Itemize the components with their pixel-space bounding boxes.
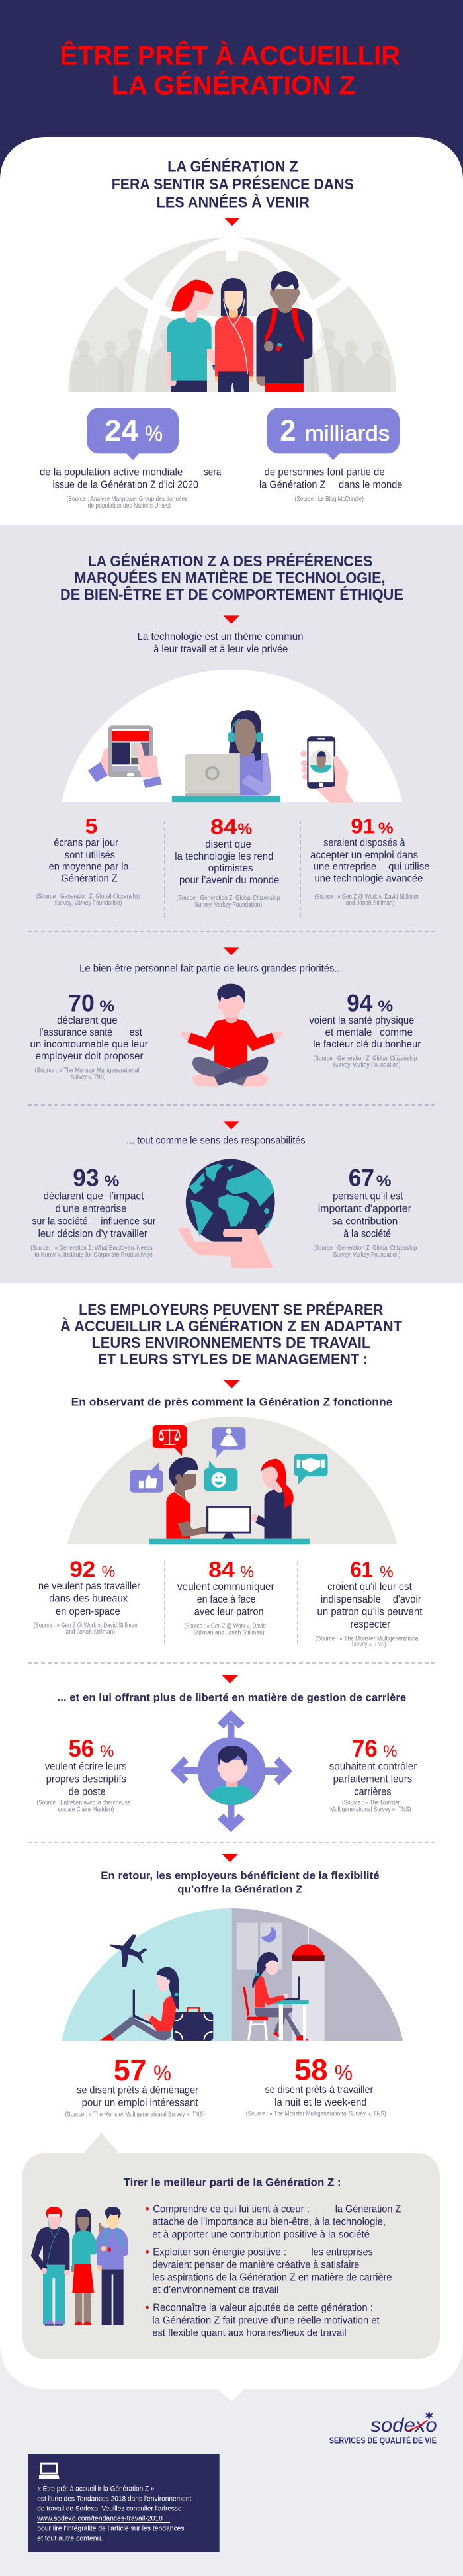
stat: 76 %: % [383, 1742, 397, 1761]
stat: 94 %: et mentale [325, 1026, 372, 1038]
stat: 91 %: qui utilise [388, 861, 430, 872]
man [166, 1457, 215, 1539]
stat: 93 %: l’impact [109, 1190, 144, 1202]
stat: 91 %: % [378, 819, 394, 837]
stat: 84 % face à face: en face à face [197, 1593, 256, 1605]
stat: 93 %: to Know », Institute for Corporate Productivity) [34, 1251, 153, 1259]
stat: 2 milliards: dans le monde [339, 479, 402, 490]
stat: 93 %: % [105, 1173, 119, 1190]
note text: est l'une des Tendances 2018 dans l'environnement [37, 2495, 192, 2503]
subheading well-being: Le bien-être personnel fait partie de leurs grandes priorités... [79, 963, 343, 974]
illustration: technology dome [62, 670, 402, 803]
stat: 61 %: un patron qu'ils peuvent [317, 1606, 423, 1617]
stat: 61 %: respecter [350, 1619, 390, 1630]
woman [247, 1459, 294, 1539]
tip 2: Exploiter son énergie positive : [153, 2246, 286, 2258]
callout heading: Tirer le meilleur parti de la Génération Z : [124, 2176, 341, 2189]
note text: de travail de Sodexo. Veuillez consulter l'adresse [37, 2505, 182, 2512]
stat: 57 %: (Source : « The Monster Multigenerational Survey », TNS) [65, 2110, 205, 2118]
stat: 61 %: 61 [350, 1558, 373, 1583]
person in teal [71, 2209, 106, 2325]
window and moon [237, 1923, 282, 1970]
note text [36, 2485, 192, 2542]
illustration: three people [31, 2207, 128, 2326]
arrow [224, 218, 240, 226]
icon: person with four arrows [171, 1710, 292, 1832]
note text: et tout autre contenu. [37, 2534, 103, 2542]
stat: 67 %: Survey, Varkey Foundation) [333, 1251, 400, 1259]
desk [172, 796, 280, 802]
stat: 93 %: leur décision d'y travailler [38, 1228, 147, 1239]
icon: laptop [39, 2463, 60, 2479]
title [60, 40, 400, 101]
stat: 70 %: l’assurance santé [39, 1026, 112, 1038]
stat: 5 écrans: écrans par jour [54, 836, 118, 848]
stat: 70 %: employeur doit proposer [36, 1050, 144, 1061]
monitor [206, 1506, 251, 1539]
stat: 76 %: carrières [354, 1786, 392, 1797]
panel background [0, 525, 463, 1283]
stat: 56 %: % [100, 1742, 114, 1761]
subheading observation: En observant de près comment la Génération Z fonctionne [71, 1396, 392, 1408]
heading: LA GÉNÉRATION Z [167, 157, 298, 175]
footer note box [28, 2454, 220, 2552]
stat: 70 %: 70 [68, 989, 95, 1017]
subheading responsibility: ... tout comme le sens des responsabilités [126, 1135, 306, 1146]
subheading flexibility: En retour, les employeurs bénéficient de la flexibilité [101, 1870, 380, 1882]
stat: 5 écrans: (Source : Generation Z, Global Citizenship [36, 893, 140, 900]
stat: 70 %: Survey », TNS) [71, 1073, 105, 1081]
person 1 [167, 280, 228, 392]
stat: 91 % [310, 814, 430, 907]
woman on laptop [185, 710, 271, 796]
heading: LEURS ENVIRONNEMENTS DE TRAVAIL [91, 1334, 370, 1351]
stat: 67 %: % [376, 1173, 392, 1190]
stat: 92 %: ne veulent pas travailler [38, 1580, 140, 1591]
stat: 91 %: 91 [351, 814, 375, 838]
stat: 84 % face à face: (Source : « Gen Z @ Work », David [185, 1623, 266, 1630]
stat: 93 %: influence sur [101, 1216, 156, 1227]
stat: 2 milliards: milliards [305, 422, 390, 446]
stat: 94 % [309, 989, 421, 1069]
stat: 57 %: pour un emploi intéressant [82, 2097, 198, 2108]
tip 1 [146, 2203, 401, 2240]
tip 2 [146, 2246, 392, 2295]
lamp [292, 1923, 325, 2041]
stat: 76 %: (Source : « The Monster [342, 1799, 400, 1806]
stat: 91 %: and Jonah Stillman) [346, 900, 395, 907]
tip 1: et à apporter une contribution positive à la société [152, 2229, 370, 2240]
callout background [22, 2133, 440, 2359]
stat: 5 écrans: sont utilisés [65, 849, 115, 860]
stat: 84 % face à face: veulent communiquer [177, 1581, 274, 1592]
stat: 2 milliards: la Génération Z [259, 479, 325, 490]
illustration: colleagues with speech bubbles [67, 1417, 397, 1544]
icon: globe in hand [179, 1159, 275, 1268]
stat: 2 milliards [259, 408, 402, 503]
stat: 94 %: voient la santé physique [309, 1014, 414, 1026]
stat: 56 %: sociale Claire Madden) [58, 1805, 114, 1813]
desk [149, 1539, 310, 1544]
arrow [224, 1380, 240, 1388]
stat: 92 % [34, 1557, 140, 1636]
stat: 24 %: de population des Nations Unies) [88, 502, 171, 510]
phone with hand [300, 736, 355, 803]
dome [62, 670, 402, 802]
stat: 84 % technologie: 84 [210, 815, 237, 839]
stat: 84 % technologie: (Source : Generation Z, Global Citizenship [177, 895, 280, 902]
bubble [267, 408, 400, 460]
stat: 24 %: 24 [105, 414, 138, 448]
stat: 94 %: % [378, 997, 393, 1014]
stat: 93 %: (Source: [30, 1244, 50, 1252]
stat: 57 % [65, 2053, 205, 2118]
stat: 5 écrans: Génération Z [61, 872, 118, 884]
stat: 58 % [246, 2053, 386, 2117]
subheading technology: à leur travail et à leur vie privée [153, 643, 288, 655]
icon: smiley bubble [204, 1460, 237, 1491]
stat: 67 %: important d'apporter [318, 1203, 411, 1214]
plane [110, 1934, 147, 1967]
stat: 84 % technologie: la technologie les rend [175, 850, 273, 862]
stat: 70 %: % [99, 997, 114, 1014]
stat: 56 %: (Source : Entretien avec la chercheuse [36, 1799, 131, 1806]
logo: sodexo: sodexo [370, 2415, 437, 2436]
stat: 57 %: 57 [114, 2053, 146, 2087]
tip 3 [146, 2302, 380, 2338]
stat: 76 %: Multigenerational Survey », TNS) [330, 1805, 411, 1813]
tip 2: devraient penser de manière créative à satisfaire [152, 2259, 359, 2270]
note text: pour lire l'intégralité de l'article sur les tendances [37, 2524, 185, 2532]
heading: LES ANNÉES À VENIR [157, 193, 310, 210]
stat: 84 % face à face: avec leur patron [194, 1606, 264, 1617]
stat: 94 %: 94 [347, 989, 373, 1017]
stat: 61 %: Survey », TNS) [352, 1641, 386, 1648]
stat: 93 %: 93 [73, 1165, 99, 1192]
stat: 67 % [314, 1165, 417, 1259]
stat: 56 % [36, 1735, 131, 1813]
stat: 67 %: à la société [343, 1228, 391, 1239]
icon: handshake bubble [294, 1454, 328, 1484]
stat: 93 %: d’une entreprise [55, 1203, 127, 1214]
callout: tirer le meilleur parti [22, 2133, 440, 2359]
tablet with hands [88, 725, 162, 788]
stat: 61 %: indispensable [321, 1593, 381, 1605]
box background [28, 2454, 220, 2552]
dome [67, 1417, 397, 1544]
heading [112, 157, 354, 210]
dome halves [62, 1908, 232, 2041]
illustration: globe dome with crowd [68, 237, 396, 392]
illustration: three young people [167, 271, 312, 392]
stat: 70 %: (Source : « The Monster Multigenerational [35, 1066, 139, 1074]
stat: 24 %: % [145, 423, 163, 446]
woman at desk [243, 1952, 309, 2040]
bubble [87, 408, 179, 460]
stat: 58 %: % [335, 2061, 353, 2085]
icon: thumbs-up bubble [130, 1462, 163, 1493]
stat: 84 % technologie: % [237, 821, 253, 838]
icon: scales bubble [153, 1425, 187, 1456]
stat: 2 milliards: de personnes font partie de [265, 466, 385, 478]
tip 2: les entreprises [312, 2246, 373, 2258]
stat: 91 %: seraient disposés à [323, 836, 405, 848]
person 2 [215, 278, 253, 392]
tip 3: Reconnaître la valeur ajoutée de cette génération : [153, 2302, 373, 2313]
stat: 24 %: issue de la Génération Z d'ici 2020 [52, 479, 198, 490]
stat: 5 écrans: 5 [85, 814, 97, 838]
stat: 67 %: pensent qu’il est [333, 1190, 403, 1202]
tip 3: la Génération Z fait preuve d'une réelle motivation et [152, 2315, 380, 2326]
stat: 84 % face à face [177, 1558, 274, 1636]
arrow [224, 615, 239, 624]
stat: 84 % technologie: pour l’avenir du monde [179, 874, 279, 886]
stat: 84 % technologie: disent que [205, 838, 251, 850]
tip 3: est flexible quant aux horaires/lieux de travail [152, 2327, 347, 2338]
stat: 57 %: % [153, 2062, 171, 2086]
stat: 92 %: 92 [69, 1557, 95, 1582]
stat: 58 %: se disent prêts à travailler [265, 2084, 373, 2095]
stat: 56 %: propres descriptifs [46, 1773, 126, 1785]
stat: 24 %: (Source : Analyse Manpower Group des données [66, 495, 188, 503]
stat: 61 % [316, 1558, 423, 1648]
person in purple [97, 2207, 128, 2325]
stat: 91 %: accepter un emploi dans [310, 849, 418, 860]
stat: 93 %: « Generation Z: What Employers Needs [55, 1244, 153, 1252]
stat: 92 %: and Jonah Stillman) [66, 1628, 115, 1636]
stat: 70 %: est [130, 1026, 142, 1038]
arrow [224, 1121, 239, 1130]
stat: 84 % technologie: Survey, Varkey Foundation) [194, 901, 262, 909]
arrow [222, 1854, 238, 1862]
panel: préférences technologie, bien-être, éthique [0, 525, 463, 1283]
stat: 92 %: en open-space [56, 1605, 120, 1617]
stat: 67 %: 67 [349, 1165, 374, 1192]
stat: 61 %: d'avoir [393, 1593, 421, 1605]
stat: 5 écrans [36, 814, 140, 907]
heading [60, 1301, 402, 1368]
stat: 84 % face à face: Stillman and Jonah Stillman) [193, 1630, 265, 1636]
tip 1: la Génération Z [335, 2203, 401, 2215]
stat: 91 %: une entreprise [314, 861, 376, 872]
stat: 84 % face à face: % [240, 1562, 254, 1581]
stat: 24 % [40, 408, 222, 510]
stat: 94 %: Survey, Varkey Foundation) [333, 1061, 400, 1069]
stat: 24 %: de la population active mondiale [40, 466, 183, 478]
stat: 70 % [30, 989, 148, 1081]
stat: 56 %: de poste [69, 1786, 106, 1797]
heading: ET LEURS STYLES DE MANAGEMENT : [98, 1351, 368, 1368]
stat: 70 %: un incontournable que leur [30, 1038, 148, 1049]
stat: 5 écrans: Survey, Varkey Foundation) [55, 900, 122, 907]
tip 2: et d’environnement de travail [152, 2284, 278, 2295]
panel: les employeurs peuvent se préparer [0, 1283, 463, 2401]
stat: 76 %: parfaitement leurs [333, 1773, 412, 1785]
stat: 58 %: 58 [294, 2053, 328, 2086]
stat: 58 %: la nuit et le week-end [274, 2096, 366, 2108]
stat: 5 écrans: en moyenne par la [49, 861, 129, 872]
tips list [146, 2203, 401, 2338]
subheading technology [138, 631, 303, 655]
illustration: travel and night work [62, 1908, 403, 2041]
stat: 76 % [329, 1735, 417, 1813]
panel background [0, 137, 463, 525]
stat: 70 %: déclarent que [57, 1014, 118, 1026]
stat: 61 %: croient qu'il leur est [327, 1581, 412, 1592]
arrow [224, 947, 239, 955]
stat: 57 %: se disent prêts à déménager [77, 2084, 198, 2096]
stat: 76 %: 76 [352, 1735, 378, 1762]
person in navy [31, 2207, 70, 2326]
stat: 93 %: déclarent que [44, 1190, 103, 1202]
subheading flexibility: qu’offre la Génération Z [177, 1884, 303, 1896]
heading [60, 553, 403, 603]
subheading flexibility [101, 1870, 380, 1896]
stat: 92 %: (Source : « Gen Z @ Work », David Stillman [34, 1622, 138, 1629]
tip 1: Comprendre ce qui lui tient à cœur : [153, 2203, 310, 2215]
stat: 2 milliards: (Source : Le Blog McCrindle) [295, 495, 364, 503]
icon: meditating person [180, 984, 283, 1087]
stat: 61 %: % [380, 1562, 394, 1581]
subheading technology: La technologie est un thème commun [138, 631, 303, 643]
panel background with tail [0, 1283, 463, 2401]
note text: www.sodexo.com/tendances-travail-2018 [36, 2514, 163, 2522]
stat: 67 %: sa contribution [332, 1216, 398, 1227]
stat: 84 % face à face: 84 [208, 1558, 235, 1583]
stat: 92 %: dans des bureaux [49, 1593, 128, 1604]
stat: 84 % technologie: optimistes [208, 862, 253, 874]
header band [0, 0, 463, 199]
suitcase [173, 2008, 213, 2041]
stat: 56 %: 56 [69, 1735, 94, 1762]
stat: 84 % technologie [175, 815, 280, 909]
stat: 24 %: sera [204, 466, 222, 478]
stat: 92 %: % [102, 1562, 115, 1580]
panel: la génération Z fera sentir sa présence [0, 137, 463, 525]
person 3 [257, 271, 312, 392]
stat: 93 %: sur la société [32, 1216, 88, 1227]
stat: 94 %: comme [380, 1026, 413, 1038]
logo: sodexo [329, 2411, 437, 2446]
title: LA GÉNÉRATION Z [112, 70, 355, 101]
stat: 94 %: le facteur clé du bonheur [313, 1038, 421, 1049]
seated traveller [100, 1967, 179, 2040]
stat: 91 %: une technologie avancée [314, 872, 423, 884]
heading: FERA SENTIR SA PRÉSENCE DANS [112, 175, 354, 193]
stat: 76 %: souhaitent contrôler [329, 1761, 417, 1772]
stat: 93 % [30, 1165, 156, 1259]
icon: meditation bubble [212, 1427, 245, 1458]
stat: 56 %: veulent écrire leurs [45, 1761, 127, 1772]
arrow [222, 1675, 238, 1683]
stat: 2 milliards: 2 [280, 414, 296, 447]
note text: « Être prêt à accueillir la Génération Z » [37, 2485, 154, 2493]
